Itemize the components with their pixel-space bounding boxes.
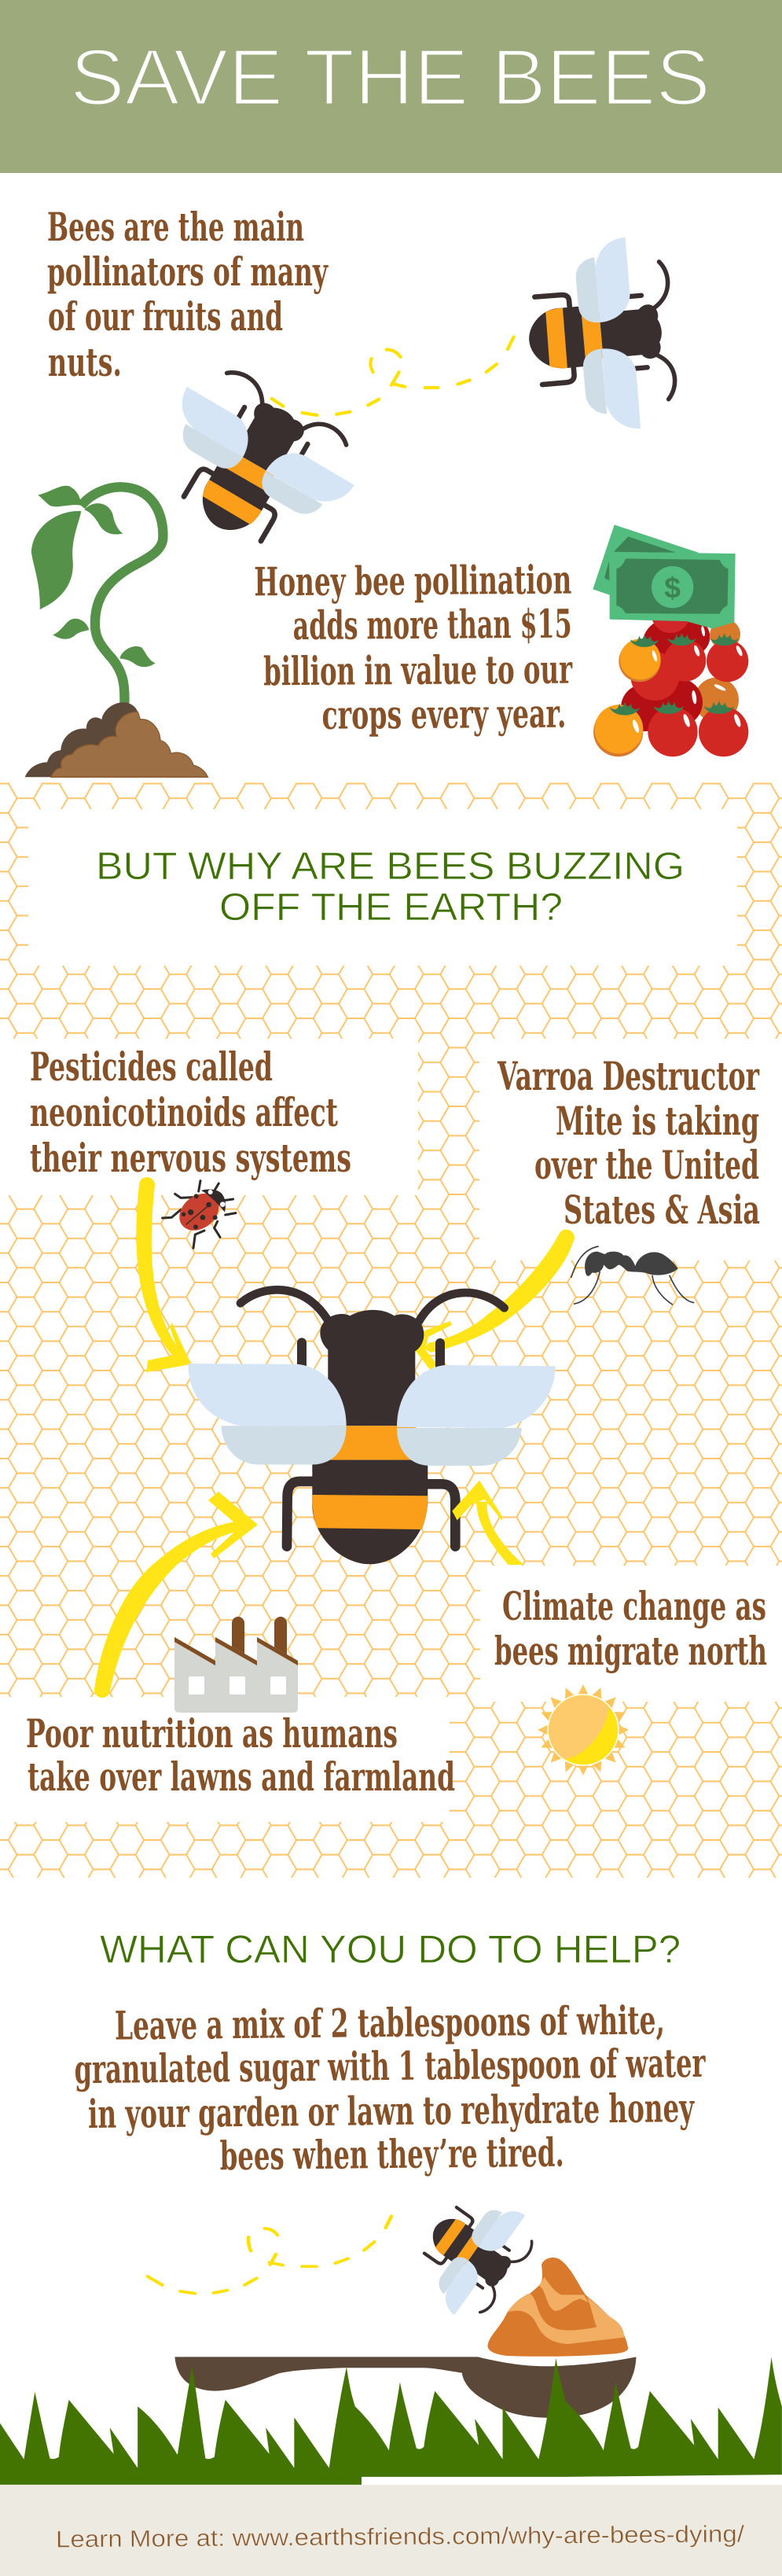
icon: spoon with honey	[174, 2258, 636, 2418]
text: honey bee value	[254, 557, 573, 738]
icon: flying bee centre	[134, 353, 374, 576]
panel: climate change	[480, 1566, 782, 1702]
text: honey bee value: crops every year.	[321, 690, 567, 738]
text: main pollinators: of our fruits and	[48, 293, 283, 340]
heading: why are bees buzzing	[96, 845, 685, 929]
footer band	[0, 2485, 782, 2576]
honeycomb background	[0, 783, 782, 1878]
text: main pollinators: pollinators of many	[47, 248, 329, 295]
arrow: climate change to bee	[452, 1481, 524, 1565]
text: honey bee value: billion in value to our	[263, 646, 573, 694]
icon: ladybug	[163, 1181, 236, 1248]
text: honey bee value: adds more than $15	[292, 601, 572, 649]
flight path dashes: spoon bee	[148, 2216, 391, 2294]
text: sugar water tip	[74, 1996, 707, 2180]
arrow: pesticides to bee	[136, 1177, 191, 1372]
icon: ant	[571, 1246, 694, 1305]
arrow: varroa mite to bee	[415, 1230, 575, 1371]
icon: factory	[174, 1617, 298, 1713]
illustration: central bee	[188, 1290, 556, 1564]
footer link text: Learn More at: www.earthsfriends.com/why-are-bees-dying/	[56, 2522, 745, 2552]
icon: sun	[538, 1684, 629, 1776]
panel: pesticides	[0, 1039, 418, 1195]
text: main pollinators: nuts.	[48, 339, 122, 385]
heading: why are bees buzzing: OFF THE EARTH?	[219, 886, 563, 929]
icon: flying bee top right	[521, 234, 681, 437]
icon: tomatoes and dollar bills: $	[664, 571, 681, 604]
header band	[0, 0, 782, 173]
panel: poor nutrition: take over lawns and farmland	[28, 1754, 455, 1800]
panel: pesticides: their nervous systems	[30, 1135, 351, 1181]
grass	[0, 2357, 782, 2485]
flight path dashes: top bees	[272, 337, 514, 415]
panel: poor nutrition: Poor nutrition as humans	[26, 1710, 398, 1757]
panel: why heading	[28, 809, 737, 966]
icon: tomatoes and dollar bills	[593, 524, 748, 756]
title: SAVE THE BEES	[70, 34, 710, 122]
heading: why are bees buzzing: BUT WHY ARE BEES BUZZING	[96, 845, 685, 888]
panel: poor nutrition	[0, 1697, 455, 1822]
text: sugar water tip: bees when they’re tired.	[219, 2129, 564, 2179]
panel: varroa mite	[479, 1039, 782, 1260]
heading: what can you do: WHAT CAN YOU DO TO HELP?	[100, 1927, 681, 1971]
panel: pesticides: Pesticides called	[30, 1043, 273, 1090]
text: honey bee value: Honey bee pollination	[254, 557, 571, 605]
icon: seedling in soil	[25, 486, 207, 777]
icon: bee by spoon	[400, 2177, 545, 2330]
arrow: poor nutrition to bee	[94, 1492, 258, 1698]
panel: pesticides: neonicotinoids affect	[30, 1089, 338, 1135]
text: main pollinators	[47, 204, 329, 385]
text: main pollinators: Bees are the main	[47, 204, 304, 250]
